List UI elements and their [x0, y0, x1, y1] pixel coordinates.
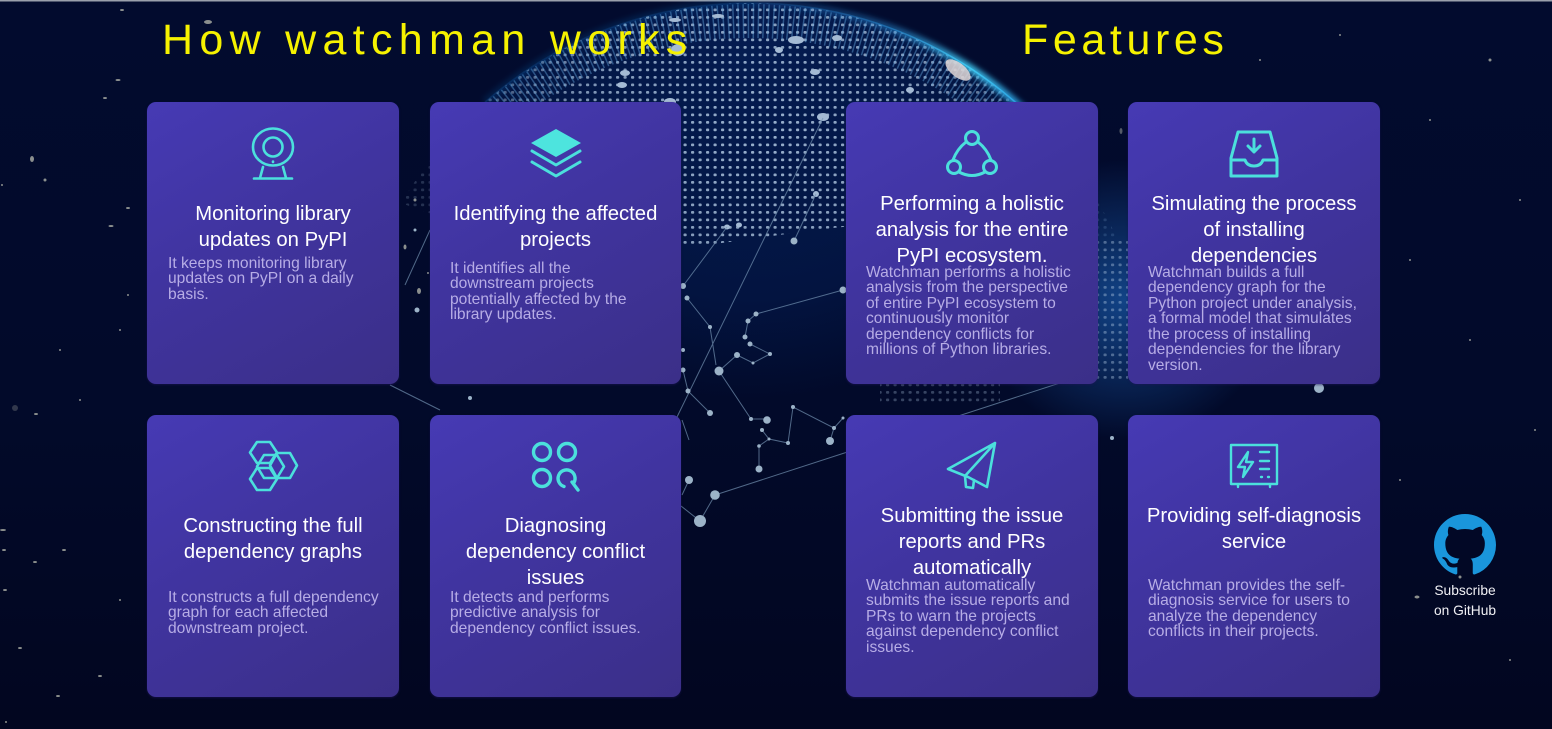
icon: GitHub logo	[1434, 514, 1496, 574]
icon: three connected nodes	[946, 130, 998, 177]
title: analysis for the entire	[876, 219, 1068, 241]
title: reports and PRs	[899, 531, 1045, 553]
description	[450, 589, 641, 637]
description: potentially affected by the	[450, 291, 627, 308]
card: constructing dependency graphs	[147, 415, 399, 697]
title: service	[1222, 531, 1286, 553]
icon: webcam	[252, 127, 294, 180]
description: version.	[1148, 357, 1203, 374]
description: issues.	[866, 639, 915, 656]
description: the process of installing	[1148, 326, 1311, 343]
description: diagnosis service for users to	[1148, 592, 1350, 609]
description: dependencies for the library	[1148, 341, 1340, 358]
description: basis.	[168, 286, 209, 303]
description: a formal model that simulates	[1148, 310, 1352, 327]
title: Diagnosing	[505, 515, 606, 537]
description: Watchman performs a holistic	[866, 264, 1071, 281]
label: Subscribe on GitHub: on GitHub	[1434, 603, 1496, 618]
title: Identifying the affected	[454, 203, 657, 225]
title: projects	[520, 229, 591, 251]
description: downstream project.	[168, 620, 308, 637]
description	[866, 577, 1070, 656]
description: of entire PyPI ecosystem to	[866, 295, 1056, 312]
icon: layers	[530, 129, 582, 178]
description: updates on PyPI on a daily	[168, 270, 354, 287]
description: Watchman provides the self-	[1148, 577, 1345, 594]
title: Simulating the process	[1151, 193, 1357, 215]
description: conflicts in their projects.	[1148, 623, 1319, 640]
description: predictive analysis for	[450, 604, 600, 621]
title: PyPI ecosystem.	[896, 245, 1048, 267]
description: PRs to warn the projects	[866, 608, 1036, 625]
title: dependency conflict	[466, 541, 645, 563]
description: It constructs a full dependency	[168, 589, 379, 606]
description: downstream projects	[450, 275, 594, 292]
card: diagnosing dependency conflicts	[430, 415, 681, 697]
title	[1147, 505, 1361, 553]
card: submitting issue reports	[846, 415, 1098, 697]
description: graph for each affected	[168, 604, 328, 621]
title	[466, 515, 645, 589]
icon: hexagons	[248, 440, 298, 492]
title: Constructing the full	[183, 515, 363, 537]
icon: diagnostic panel with lightning bolt	[1230, 444, 1278, 488]
title	[454, 203, 657, 251]
title: updates on PyPI	[199, 229, 347, 251]
icon: four circles with magnifier	[532, 442, 580, 492]
description: It detects and performs	[450, 589, 609, 606]
title: dependency graphs	[184, 541, 362, 563]
description: Python project under analysis,	[1148, 295, 1357, 312]
icon: inbox with download arrow	[1230, 130, 1278, 178]
heading: Features: Features	[1022, 16, 1228, 64]
description: against dependency conflict	[866, 623, 1058, 640]
card: simulating installation	[1128, 102, 1380, 384]
description	[866, 264, 1071, 358]
title: Monitoring library	[195, 203, 351, 225]
description: submits the issue reports and	[866, 592, 1070, 609]
description: dependency graph for the	[1148, 279, 1326, 296]
description: dependency conflicts for	[866, 326, 1034, 343]
description: millions of Python libraries.	[866, 341, 1051, 358]
title	[195, 203, 351, 251]
description: It keeps monitoring library	[168, 255, 347, 272]
description	[1148, 577, 1350, 640]
title: of installing	[1203, 219, 1305, 241]
description: continuously monitor	[866, 310, 1009, 327]
title: issues	[527, 567, 584, 589]
card: identifying affected projects	[430, 102, 681, 384]
title	[183, 515, 363, 563]
title	[876, 193, 1068, 267]
description: library updates.	[450, 306, 557, 323]
card: monitoring library updates	[147, 102, 399, 384]
description: Watchman automatically	[866, 577, 1035, 594]
description: dependency conflict issues.	[450, 620, 641, 637]
description: It identifies all the	[450, 260, 570, 277]
title: Submitting the issue	[881, 505, 1063, 527]
heading: How watchman works: How watchman works	[162, 16, 694, 64]
description	[450, 260, 627, 323]
label: Subscribe on GitHub: Subscribe	[1434, 583, 1496, 598]
card: self-diagnosis service	[1128, 415, 1380, 697]
description	[168, 255, 354, 303]
title	[881, 505, 1063, 579]
description	[1148, 264, 1357, 374]
label: Subscribe on GitHub	[1434, 583, 1496, 618]
description: Watchman builds a full	[1148, 264, 1304, 281]
description	[168, 589, 379, 637]
description: analysis from the perspective	[866, 279, 1068, 296]
description: analyze the dependency	[1148, 608, 1317, 625]
icon: paper plane	[946, 442, 996, 490]
title: automatically	[913, 557, 1031, 579]
title	[1151, 193, 1357, 267]
title: Performing a holistic	[880, 193, 1064, 215]
card: holistic analysis	[846, 102, 1098, 384]
title: Providing self-diagnosis	[1147, 505, 1361, 527]
title: dependencies	[1191, 245, 1317, 267]
